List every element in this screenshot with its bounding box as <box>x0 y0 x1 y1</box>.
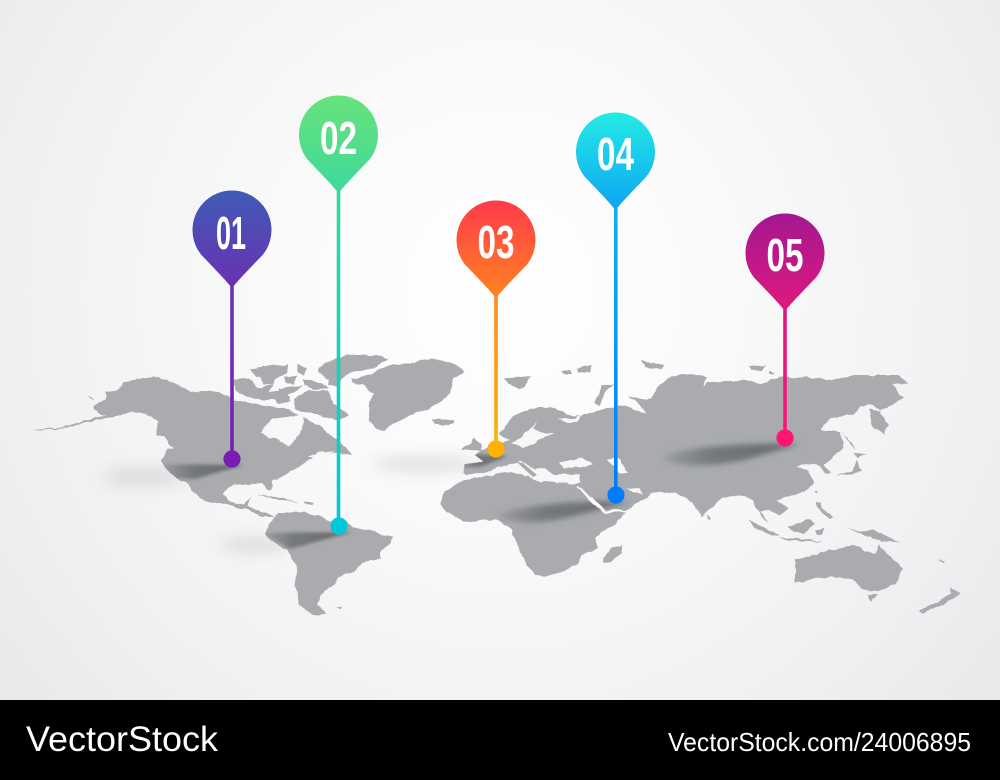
pin 04 <box>576 113 655 504</box>
footer image id: VectorStock.com/24006895 <box>668 727 971 757</box>
land: Italy <box>517 462 537 477</box>
pin 01: 01 <box>216 207 246 259</box>
pin 03: 03 <box>478 216 514 268</box>
pin 05 <box>745 214 824 447</box>
shadow: pin 04 <box>497 502 630 522</box>
shadow: pin 03 <box>455 454 508 467</box>
pin 01 <box>192 191 272 468</box>
land: Canadian Arctic islands <box>234 359 349 420</box>
inland seas and bays <box>260 413 642 494</box>
pin 03 <box>456 201 536 458</box>
pin 04: 04 <box>597 128 634 180</box>
land: Eurasia, Africa and Oceania <box>440 360 961 613</box>
shadow: pin 05 <box>662 444 800 465</box>
pin shadows on land <box>163 444 800 549</box>
pin 02 <box>299 96 378 535</box>
pin 05: 05 <box>766 229 804 281</box>
shadow: pin 01 <box>163 464 244 479</box>
pin 02: 02 <box>320 112 357 164</box>
shadow: pin 02 <box>262 532 352 549</box>
land: Americas and Greenland <box>33 355 465 615</box>
soft ground shadows outside the land <box>103 458 480 551</box>
world map <box>33 355 961 615</box>
footer bar <box>0 700 1000 780</box>
footer logo: VectorStock <box>26 720 219 759</box>
